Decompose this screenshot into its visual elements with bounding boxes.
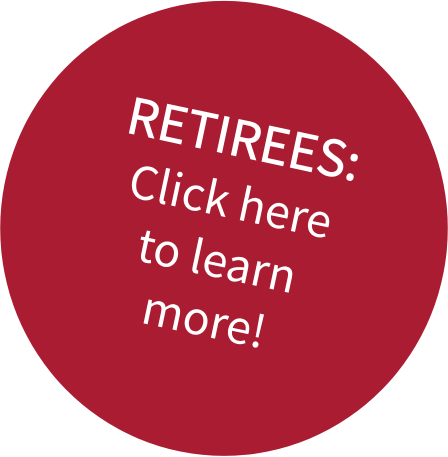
text line: more: more! — [137, 272, 273, 361]
text line: to learn: to learn — [132, 209, 303, 306]
text line: Click here: Click here — [124, 145, 339, 252]
heading: RETIREES: RETIREES: — [121, 77, 368, 196]
text block: rotated message — [121, 77, 368, 361]
